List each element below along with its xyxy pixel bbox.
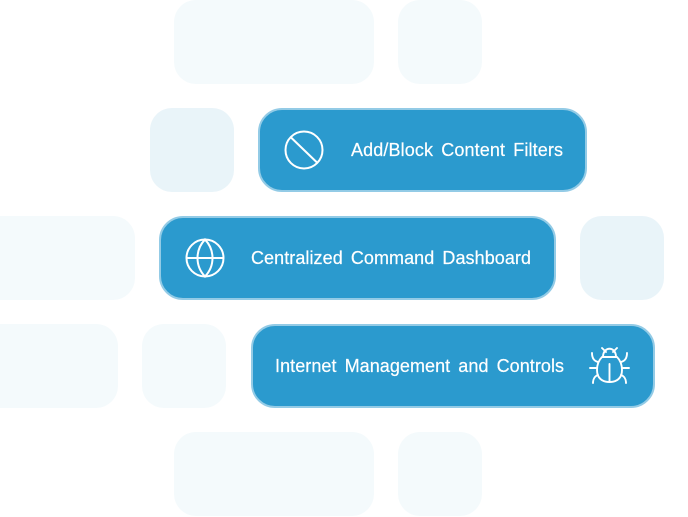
filters label: Add/Block Content Filters: [351, 140, 563, 160]
controls label: Internet Management and Controls: [275, 356, 564, 376]
icon: blocked circle: [286, 132, 322, 168]
background block: top wide: [174, 0, 374, 84]
background block: bottom wide: [174, 432, 374, 516]
background block: lower left square: [142, 324, 226, 408]
background block: square left of filters: [150, 108, 234, 192]
controls card: [252, 325, 654, 407]
dashboard label: Centralized Command Dashboard: [251, 248, 531, 268]
icon: bug: [590, 348, 629, 383]
background block: middle left wide: [0, 216, 135, 300]
panel: add/block content filters: [259, 109, 586, 191]
background block: middle right square: [580, 216, 664, 300]
background block: top square: [398, 0, 482, 84]
icon: globe: [186, 240, 224, 276]
background block: lower left wide: [0, 324, 118, 408]
panel: centralized command dashboard: [160, 217, 555, 299]
panel: internet management and controls: [252, 325, 654, 407]
background block: bottom square: [398, 432, 482, 516]
filters card: [259, 109, 586, 191]
dashboard card: [160, 217, 555, 299]
